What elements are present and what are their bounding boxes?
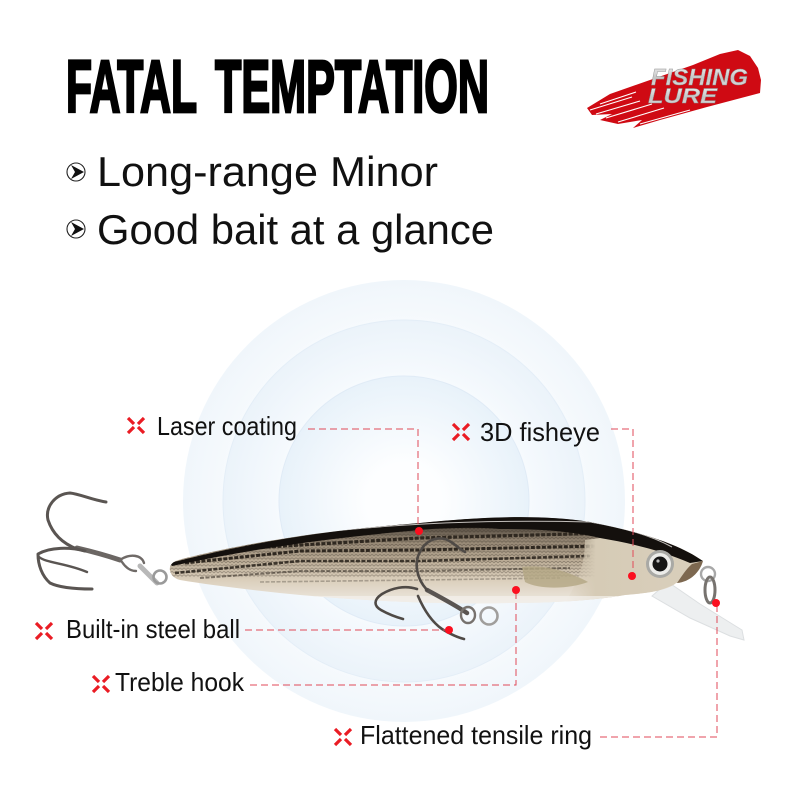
title: TEMPTATION [215, 45, 489, 128]
callout: 3D fisheye: 3D fisheye [480, 417, 600, 447]
callout: laser coating: Laser coating [157, 411, 297, 441]
3D eye [646, 550, 674, 578]
title [66, 45, 489, 128]
mouth [677, 561, 703, 583]
callout: flattened tensile ring: Flattened tensile ring [360, 720, 592, 750]
transparent diving lip [652, 582, 744, 640]
bullet: good bait at a glance: Good bait at a glance [97, 206, 494, 253]
body shell with stripes [165, 514, 710, 606]
logo text: LURE [648, 85, 718, 108]
nose ring [701, 567, 715, 603]
callout dots [415, 527, 720, 634]
lure body [165, 514, 744, 640]
logo streaks [590, 92, 690, 124]
callout: built-in steel ball: Built-in steel ball [66, 614, 240, 644]
logo text: FISHING [651, 64, 748, 90]
logo brush stroke [587, 50, 761, 128]
rear treble hook [38, 493, 166, 589]
head plate [574, 538, 702, 600]
dark back [170, 517, 703, 566]
lower belly fade [316, 596, 618, 603]
pectoral fin [522, 566, 588, 588]
callout leader lines [245, 429, 717, 737]
infographic canvas [34, 50, 761, 750]
concentric blue circles [183, 280, 625, 722]
title: FATAL [66, 45, 197, 128]
logo: fishing lure brush badge [587, 50, 761, 128]
belly treble hook [376, 539, 498, 639]
bullet: long-range minor: Long-range Minor [97, 148, 438, 195]
logo text [648, 64, 748, 108]
callout: treble hook: Treble hook [115, 667, 245, 697]
